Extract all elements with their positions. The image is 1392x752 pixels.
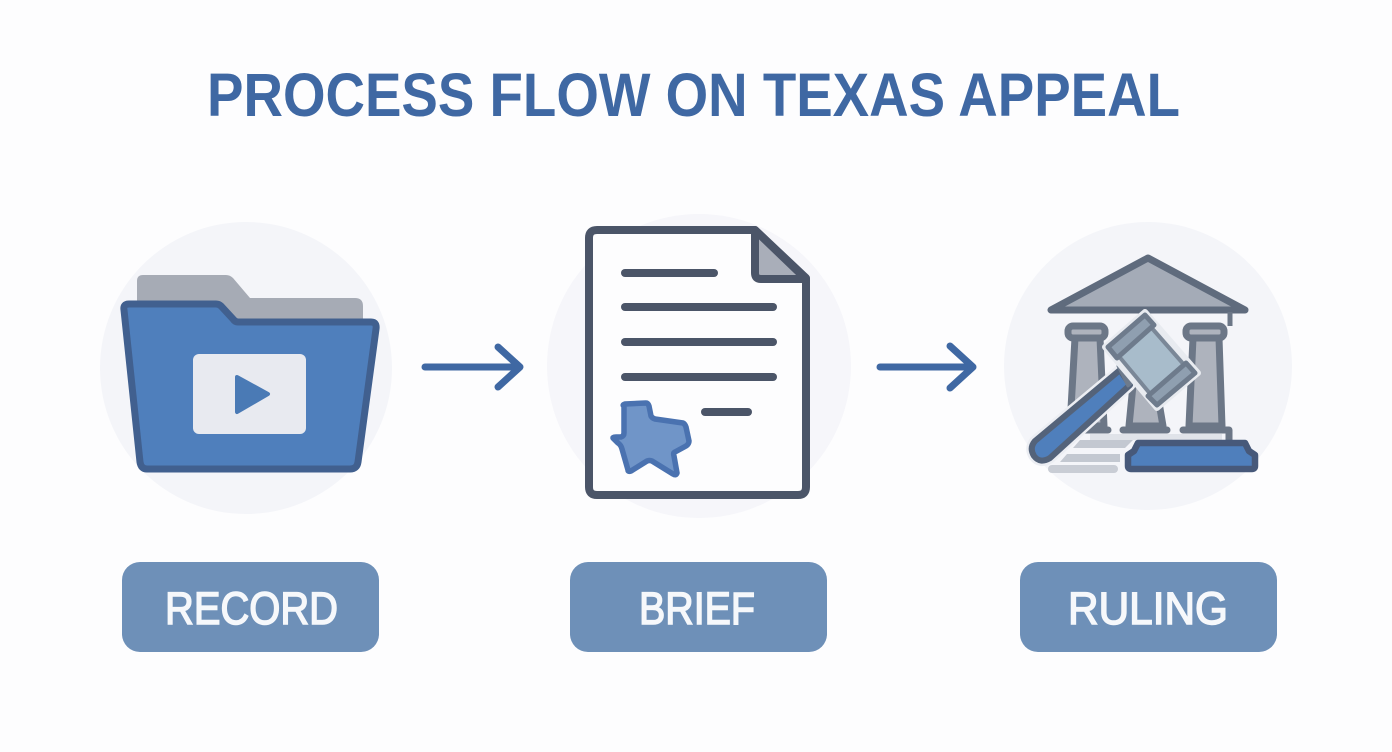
- icon backdrop circle: ruling: [1004, 222, 1292, 510]
- step 1: record: [100, 222, 392, 652]
- courthouse steps: [1048, 434, 1222, 473]
- courthouse: [1051, 258, 1245, 442]
- step 3: ruling: [1004, 222, 1292, 652]
- sound block base: [1128, 443, 1255, 469]
- gavel head: [1105, 312, 1198, 408]
- icon backdrop circle: brief: [547, 214, 851, 518]
- text lines: [625, 273, 773, 412]
- play symbol: [237, 377, 268, 412]
- label pill: brief: [570, 562, 827, 652]
- folded corner: [755, 230, 806, 279]
- label pill: ruling: RULING: [1068, 583, 1228, 634]
- gavel handle: [1032, 360, 1138, 461]
- video screen: [193, 354, 306, 434]
- document sheet: [589, 230, 806, 495]
- icon: courthouse and gavel: [1032, 258, 1255, 473]
- icon: folder with video: [124, 275, 376, 469]
- label pill: record: RECORD: [165, 583, 338, 634]
- icon backdrop circle: record: [100, 222, 392, 514]
- arrow: brief to ruling: [880, 346, 973, 388]
- Texas state seal: [613, 403, 689, 475]
- label pill: ruling: [1020, 562, 1277, 652]
- arrow: record to brief: [425, 347, 520, 387]
- step 2: brief: [547, 214, 851, 652]
- folder back sheet: [137, 275, 363, 325]
- label pill: brief: BRIEF: [639, 583, 755, 634]
- label pill: record: [122, 562, 379, 652]
- icon: document: [589, 230, 806, 495]
- title: PROCESS FLOW ON TEXAS APPEAL: [207, 61, 1180, 129]
- folder front: [124, 304, 376, 469]
